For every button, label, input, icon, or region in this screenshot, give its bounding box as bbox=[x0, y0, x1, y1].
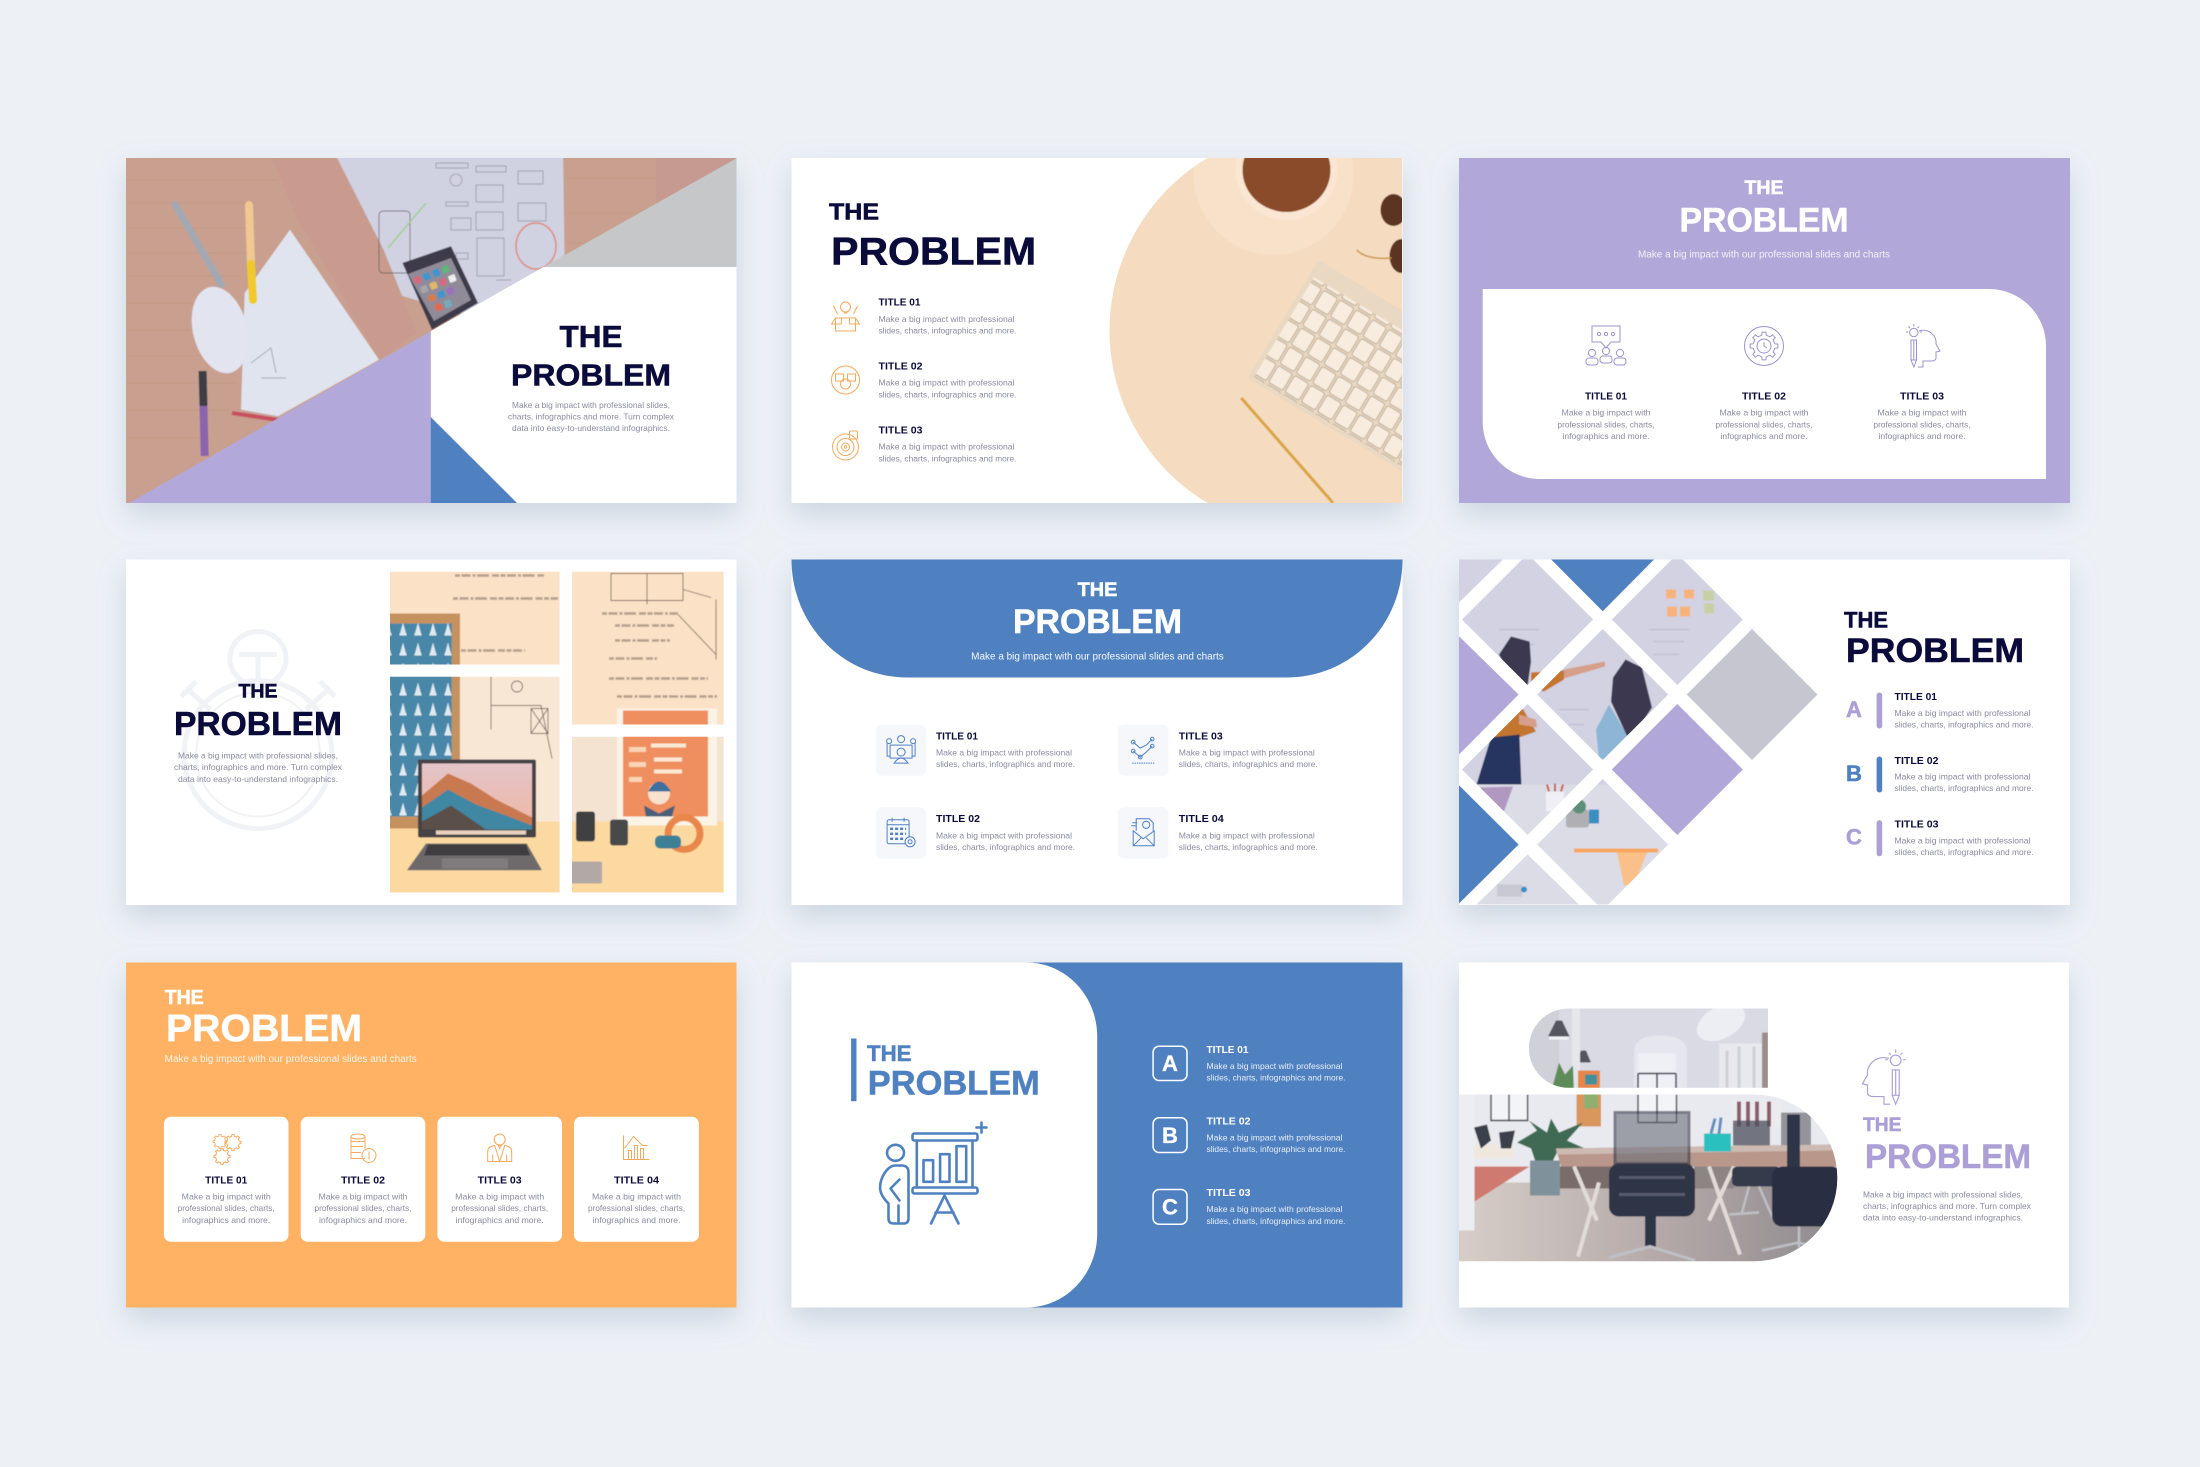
list item 2: slides, charts, infographics and more. bbox=[878, 389, 1016, 399]
icon: gear with clock bbox=[1744, 326, 1784, 366]
card 1: infographics and more. bbox=[182, 1215, 270, 1225]
item: title 04 bbox=[1179, 814, 1318, 852]
item B bbox=[1846, 756, 2034, 793]
item A bbox=[1846, 692, 2034, 730]
list item 3 bbox=[878, 425, 1016, 463]
shape: purple diamond bbox=[1612, 704, 1743, 835]
panel: slide 2, circle photo with list bbox=[782, 158, 1412, 524]
photo: office lower crop with desk and chairs bbox=[1451, 1088, 1843, 1268]
item A: Make a big impact with professional bbox=[1206, 1061, 1343, 1071]
infographic: nine problem slide templates bbox=[117, 158, 2079, 1328]
item C: TITLE 03 bbox=[1206, 1188, 1251, 1199]
shape: blue triangle bbox=[431, 417, 517, 504]
icon: coin stack bbox=[351, 1134, 376, 1162]
text block bbox=[508, 400, 675, 433]
column 2: Make a big impact with bbox=[1720, 408, 1809, 418]
item: title 01: TITLE 01 bbox=[936, 732, 979, 742]
icon: head with pencil and bulb bbox=[1862, 1050, 1906, 1104]
panel: slide 3, purple with three columns bbox=[1459, 158, 2070, 503]
icon: target bbox=[832, 431, 858, 460]
heading: THE bbox=[1863, 1114, 1901, 1136]
heading bbox=[511, 319, 671, 393]
heading: THE bbox=[867, 1041, 912, 1066]
icon: head with pencil and bulb bbox=[1906, 324, 1940, 367]
item: title 02 bbox=[936, 814, 1075, 852]
accent bar bbox=[851, 1038, 856, 1101]
icon: businessman bbox=[488, 1134, 512, 1162]
card 2: professional slides, charts, bbox=[314, 1203, 412, 1213]
item A: A bbox=[1162, 1051, 1178, 1076]
text block: data into easy-to-understand infographics. bbox=[1863, 1212, 2023, 1222]
text block: charts, infographics and more. Turn complex bbox=[508, 412, 675, 422]
panel: slide 4, photo grid bbox=[126, 560, 736, 905]
text block: Make a big impact with professional slides, bbox=[512, 400, 670, 410]
item A: TITLE 01 bbox=[1206, 1045, 1249, 1056]
item C: TITLE 03 bbox=[1894, 820, 1939, 830]
column 1: professional slides, charts, bbox=[1558, 419, 1654, 429]
item A bbox=[1153, 1045, 1346, 1082]
item C: Make a big impact with professional bbox=[1206, 1204, 1343, 1214]
heading: PROBLEM bbox=[868, 1064, 1040, 1102]
panel: slide 5, blue header with grid of items bbox=[792, 560, 1402, 905]
heading bbox=[174, 680, 342, 743]
shape: purple triangle bbox=[129, 331, 431, 504]
heading: PROBLEM bbox=[511, 358, 671, 393]
text block bbox=[1863, 1190, 2032, 1222]
shape: purple left bbox=[1459, 636, 1519, 754]
list item 3: TITLE 03 bbox=[878, 425, 923, 436]
subtitle: Make a big impact with our professional slides and charts bbox=[1638, 249, 1890, 260]
icon: idea box bbox=[832, 302, 860, 331]
text block: Make a big impact with professional slides, bbox=[178, 750, 338, 760]
white rounded panel bbox=[792, 962, 1097, 1308]
icon: coins bbox=[832, 366, 860, 394]
item B: Make a big impact with professional bbox=[1206, 1132, 1343, 1142]
item A: slides, charts, infographics and more. bbox=[1206, 1072, 1346, 1082]
item: title 03: Make a big impact with professional bbox=[1179, 748, 1315, 758]
icon: gears bbox=[213, 1134, 241, 1165]
text block bbox=[174, 750, 343, 784]
heading bbox=[165, 987, 362, 1050]
column 1: Make a big impact with bbox=[1562, 408, 1651, 418]
item: title 04: slides, charts, infographics and more. bbox=[1179, 842, 1318, 852]
heading: THE bbox=[165, 987, 204, 1009]
panel: slide 6, diamond mosaic bbox=[1451, 552, 2070, 910]
column 2: professional slides, charts, bbox=[1716, 419, 1812, 429]
item B: TITLE 02 bbox=[1894, 756, 1939, 767]
column 1 bbox=[1558, 392, 1654, 441]
heading bbox=[1863, 1114, 2031, 1176]
item A: A bbox=[1846, 697, 1862, 722]
item B: slides, charts, infographics and more. bbox=[1206, 1144, 1346, 1154]
column 3: TITLE 03 bbox=[1900, 392, 1945, 403]
item: title 01: Make a big impact with professional bbox=[936, 748, 1072, 758]
item C: Make a big impact with professional bbox=[1894, 836, 2031, 846]
item: title 03: slides, charts, infographics and more. bbox=[1179, 759, 1318, 769]
column 2 bbox=[1716, 392, 1812, 441]
list item 3: slides, charts, infographics and more. bbox=[878, 453, 1016, 463]
icon: presenter with bar chart board bbox=[880, 1122, 986, 1224]
shape: grey diamond bbox=[1687, 629, 1818, 760]
icon tile: envelope bbox=[1118, 807, 1168, 858]
heading: PROBLEM bbox=[1846, 632, 2024, 670]
item: title 02: TITLE 02 bbox=[936, 814, 981, 825]
item: title 02: slides, charts, infographics and more. bbox=[936, 842, 1075, 852]
item A: slides, charts, infographics and more. bbox=[1894, 720, 2034, 730]
heading: PROBLEM bbox=[174, 706, 342, 743]
shape: grey triangle bbox=[544, 158, 737, 267]
heading: THE bbox=[1744, 177, 1784, 199]
white rounded panel bbox=[1483, 289, 2046, 479]
item: title 01: slides, charts, infographics and more. bbox=[936, 759, 1075, 769]
card 3 bbox=[437, 1117, 562, 1242]
blue header shape bbox=[792, 560, 1402, 678]
column 3: infographics and more. bbox=[1878, 431, 1966, 441]
photo: office upper crop bbox=[1528, 1008, 1768, 1088]
card 4: professional slides, charts, bbox=[588, 1203, 685, 1213]
shape: blue left bbox=[1459, 785, 1519, 904]
panel: slide 9, office photo in rounded shapes bbox=[1451, 962, 2069, 1308]
card 2: Make a big impact with bbox=[318, 1192, 408, 1202]
item A: TITLE 01 bbox=[1894, 692, 1937, 703]
heading: THE bbox=[1078, 579, 1117, 601]
heading bbox=[867, 1041, 1040, 1102]
card 1: TITLE 01 bbox=[205, 1176, 248, 1186]
list item 1: slides, charts, infographics and more. bbox=[878, 326, 1016, 336]
list item 1: TITLE 01 bbox=[878, 298, 921, 309]
item C: slides, charts, infographics and more. bbox=[1894, 847, 2034, 857]
photo grid: whiteboard, laptop and desk bbox=[384, 564, 730, 900]
list item 2 bbox=[878, 362, 1016, 399]
icon tile: line chart bbox=[1118, 724, 1168, 776]
item: title 04: TITLE 04 bbox=[1179, 814, 1224, 825]
card 4: infographics and more. bbox=[592, 1215, 680, 1225]
heading: THE bbox=[238, 680, 278, 702]
panel: slide 7, orange with four cards bbox=[126, 962, 736, 1308]
item C bbox=[1153, 1188, 1346, 1226]
panel: slide 8, blue with white rounded panel bbox=[792, 962, 1402, 1308]
item B: B bbox=[1846, 761, 1862, 786]
card 4 bbox=[574, 1117, 699, 1242]
list item 1: Make a big impact with professional bbox=[878, 314, 1015, 324]
column 3 bbox=[1874, 392, 1970, 441]
card 3: professional slides, charts, bbox=[451, 1203, 548, 1213]
item C: slides, charts, infographics and more. bbox=[1206, 1216, 1346, 1226]
subtitle: Make a big impact with our professional slides and charts bbox=[165, 1054, 417, 1065]
list item 1 bbox=[878, 298, 1016, 336]
item B: Make a big impact with professional bbox=[1894, 772, 2031, 782]
item C: C bbox=[1846, 824, 1862, 850]
item C: C bbox=[1162, 1195, 1178, 1220]
item: title 03: TITLE 03 bbox=[1179, 732, 1223, 742]
item: title 02: Make a big impact with professional bbox=[936, 830, 1072, 840]
card 1: professional slides, charts, bbox=[178, 1203, 275, 1213]
heading: PROBLEM bbox=[1680, 201, 1848, 239]
item: title 03 bbox=[1179, 732, 1318, 769]
text block: Make a big impact with professional slides, bbox=[1863, 1190, 2023, 1200]
column 1: TITLE 01 bbox=[1585, 392, 1628, 403]
icon tile: team idea bbox=[876, 724, 926, 776]
item B: TITLE 02 bbox=[1206, 1116, 1251, 1128]
photo mosaic: two women at whiteboard, desk below bbox=[1459, 560, 1742, 904]
heading bbox=[1844, 608, 2024, 670]
item B: B bbox=[1162, 1123, 1178, 1148]
card 2 bbox=[301, 1117, 425, 1242]
heading: THE bbox=[829, 199, 879, 225]
icon: audience with speech bubble bbox=[1586, 326, 1626, 365]
card 4: TITLE 04 bbox=[614, 1176, 660, 1186]
icon tile: calendar bbox=[876, 807, 926, 858]
shape: blue triangle top bbox=[1551, 560, 1654, 611]
heading: THE bbox=[1844, 608, 1888, 632]
card 3: infographics and more. bbox=[456, 1215, 544, 1225]
icon: bar chart with trend bbox=[624, 1136, 650, 1160]
column 3: professional slides, charts, bbox=[1874, 419, 1970, 429]
card 2: TITLE 02 bbox=[341, 1176, 386, 1186]
card 2: infographics and more. bbox=[319, 1215, 407, 1225]
column 1: infographics and more. bbox=[1562, 431, 1650, 441]
card 3: Make a big impact with bbox=[455, 1192, 545, 1202]
column 3: Make a big impact with bbox=[1878, 408, 1967, 418]
card 1 bbox=[164, 1117, 288, 1242]
card 3: TITLE 03 bbox=[478, 1176, 522, 1186]
text block: data into easy-to-understand infographics. bbox=[178, 774, 338, 784]
text block: charts, infographics and more. Turn complex bbox=[1863, 1201, 2032, 1211]
heading: PROBLEM bbox=[1865, 1138, 2031, 1176]
subtitle: Make a big impact with our professional slides and charts bbox=[971, 652, 1224, 662]
item: title 01 bbox=[936, 732, 1075, 769]
heading: PROBLEM bbox=[831, 231, 1036, 274]
item: title 04: Make a big impact with professional bbox=[1179, 830, 1315, 840]
heading: PROBLEM bbox=[166, 1008, 362, 1050]
column 2: TITLE 02 bbox=[1742, 392, 1787, 403]
heading bbox=[1680, 177, 1848, 239]
item B bbox=[1153, 1116, 1346, 1154]
heading bbox=[1013, 579, 1182, 641]
item B: slides, charts, infographics and more. bbox=[1894, 783, 2034, 793]
text block: charts, infographics and more. Turn complex bbox=[174, 762, 343, 772]
card 4: Make a big impact with bbox=[592, 1192, 681, 1202]
item A: Make a big impact with professional bbox=[1894, 708, 2031, 718]
heading bbox=[829, 199, 1036, 274]
list item 2: Make a big impact with professional bbox=[878, 378, 1015, 388]
watermark: stopwatch bbox=[181, 632, 335, 828]
list item 3: Make a big impact with professional bbox=[878, 442, 1015, 452]
heading: PROBLEM bbox=[1013, 603, 1182, 641]
photo: desk with wireframes, arm, phone and pens bbox=[118, 150, 748, 510]
list item 2: TITLE 02 bbox=[878, 362, 923, 373]
column 2: infographics and more. bbox=[1720, 431, 1808, 441]
shape: white text panel bbox=[431, 267, 737, 504]
heading: THE bbox=[560, 319, 622, 354]
text block: data into easy-to-understand infographics. bbox=[512, 423, 670, 433]
panel: slide 1, photo with diagonal shapes bbox=[118, 150, 748, 510]
card 1: Make a big impact with bbox=[182, 1192, 271, 1202]
photo: coffee cup, keyboard and pen in circle bbox=[1110, 158, 1402, 503]
item C bbox=[1846, 820, 2034, 857]
